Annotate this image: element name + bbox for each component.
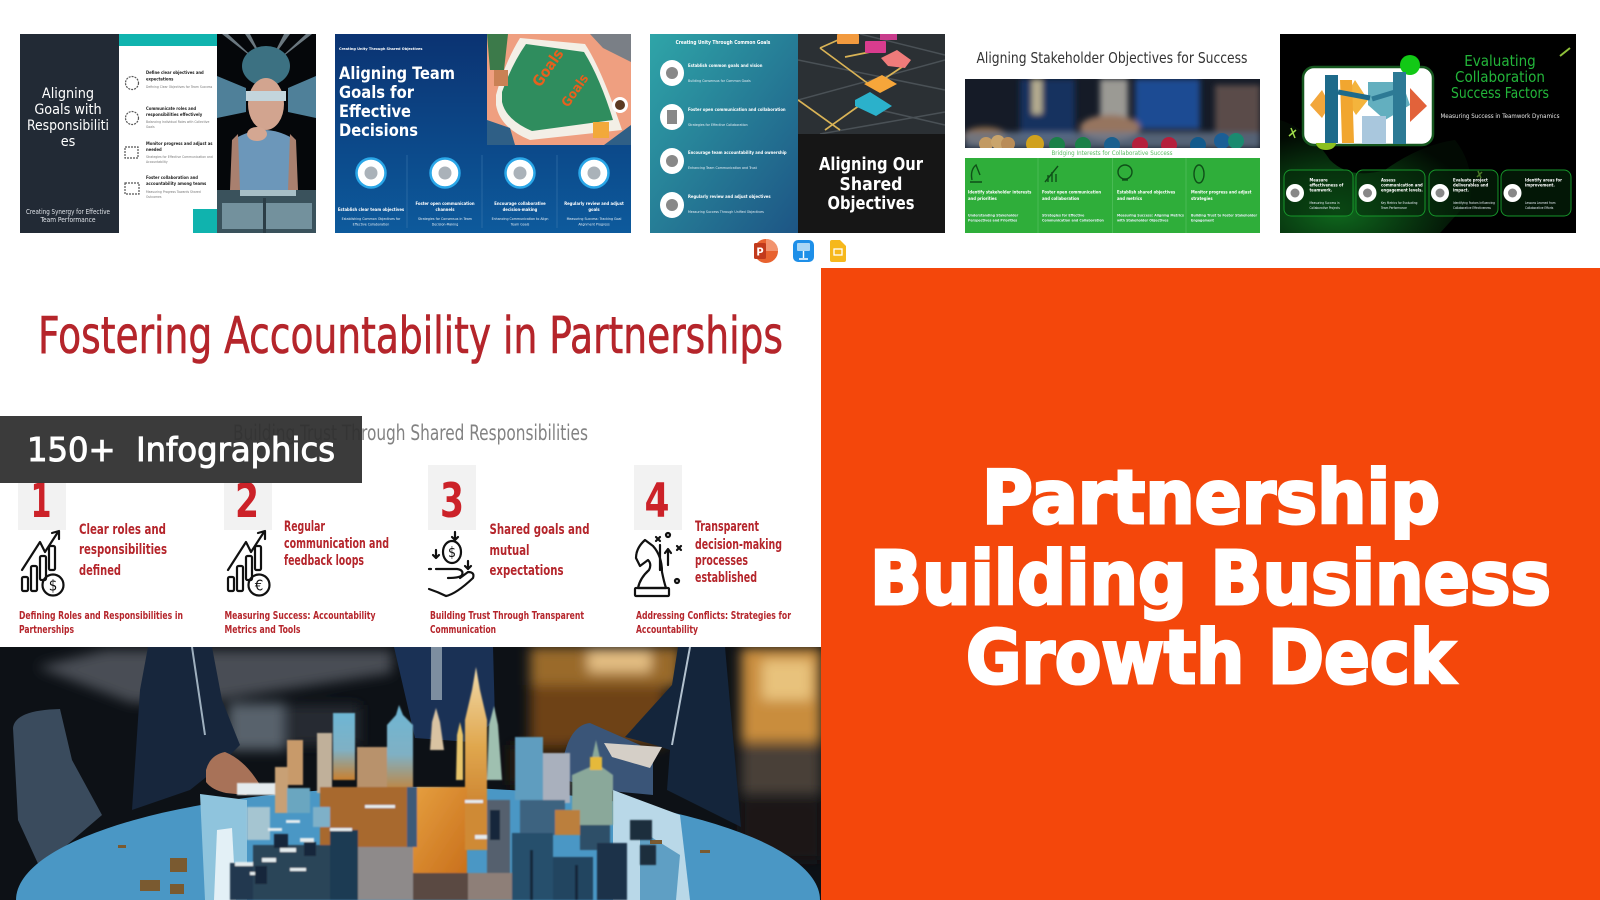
step 4: Transparent [695, 519, 759, 535]
icon: chart with dollar coin: $ [49, 576, 57, 594]
thumbnail list: Encourage team accountability and ownership [688, 150, 787, 155]
thumbnail list: Communicate roles and [146, 106, 196, 111]
thumbnail list: Goals [146, 125, 155, 129]
thumbnail list: Measuring Success Through Unified Objectives [688, 210, 764, 214]
thumbnail green panel: and metrics [1117, 196, 1143, 201]
badge: 150+ Infographics: 150+ Infographics [27, 430, 335, 469]
thumbnail cards: Evaluate project [1453, 178, 1488, 182]
thumbnail cards: improvement. [1525, 182, 1555, 188]
thumbnail subtitle: Team Performance [39, 216, 96, 224]
thumbnail list: Foster open communication and collaboration [688, 107, 786, 112]
thumbnail circles row: Encourage collaborative [494, 201, 546, 206]
thumbnail circles row [338, 155, 624, 228]
panel: main slide preview [0, 268, 821, 647]
thumbnail list: Establish common goals and vision [688, 63, 763, 68]
thumbnail circles row: Effective Collaboration [353, 222, 389, 226]
thumbnail green panel: Perspectives and Priorities [968, 218, 1017, 222]
thumbnail title: Goals with [34, 102, 102, 118]
thumbnail circles row: Enhancing Communication to Align [492, 217, 548, 221]
thumbnail title: Responsibiliti [27, 118, 109, 134]
city model [230, 667, 656, 900]
thumbnail cards: teamwork. [1310, 188, 1333, 192]
slide thumbnail: Aligning Stakeholder Objectives [963, 49, 1260, 233]
app icons row [754, 239, 846, 263]
thumbnail kicker: Creating Unity Through Common Goals [676, 40, 771, 46]
thumbnail cards: effectiveness of [1310, 182, 1344, 188]
thumbnail green panel: Measuring Success: Aligning Metrics [1117, 214, 1184, 218]
main heading: Partnership [982, 455, 1440, 541]
thumbnail title: Decisions [339, 121, 418, 141]
thumbnail title: Aligning Team [339, 64, 455, 84]
thumbnail list: Define clear objectives and [146, 70, 204, 75]
thumbnail subtitle: Measuring Success in Teamwork Dynamics [1440, 113, 1560, 120]
step 4: Accountability [636, 623, 698, 636]
thumbnail green panel: Engagement [1191, 218, 1214, 222]
thumbnail list: expectations [146, 76, 174, 82]
thumbnail title: Aligning Stakeholder Objectives for Success [976, 49, 1248, 67]
icon: Google Slides [830, 240, 846, 262]
step 3: Shared goals and [490, 522, 590, 538]
thumbnail title: Aligning Our [819, 155, 923, 175]
thumbnail list: Strategies for Effective Collaboration [688, 123, 748, 127]
thumbnail cards: Measure [1310, 178, 1328, 182]
blurred office background [37, 647, 821, 860]
step 2: Regular [284, 519, 326, 535]
step 1: 1 [30, 474, 52, 529]
icon: hand receiving coin: $ [448, 545, 456, 561]
thumbnail list: Monitor progress and adjust as [146, 141, 213, 146]
thumbnail green panel: and priorities [968, 196, 997, 201]
step 3: mutual [490, 543, 530, 559]
icon: Keynote [793, 240, 814, 262]
badge: 150+ Infographics [0, 416, 362, 483]
thumbnail green panel: Understanding Stakeholder [968, 214, 1019, 218]
thumbnail green panel: Building Trust to Foster Stakeholder [1191, 214, 1257, 218]
thumbnail photo: beads on table [963, 79, 1260, 153]
thumbnail title [339, 64, 455, 141]
thumbnail cards [1284, 170, 1571, 216]
thumbnail title: Objectives [828, 194, 914, 214]
thumbnail green panel: Establish shared objectives [1117, 190, 1176, 194]
thumbnail photo: colored tiles [798, 34, 945, 134]
step 4: established [695, 570, 757, 586]
thumbnail cards: engagement levels. [1381, 188, 1423, 192]
thumbnail list: Building Consensus for Common Goals [688, 79, 751, 83]
photo: business people around 3D city model [0, 647, 821, 900]
slide thumbnail: Aligning Our Shared Objectives [650, 34, 945, 233]
step 2: Measuring Success: Accountability [224, 609, 376, 622]
thumbnail green panel: Communication and Collaboration [1042, 218, 1105, 222]
thumbnail cards: communication and [1381, 182, 1423, 188]
thumbnail green blob background [1280, 48, 1570, 233]
thumbnail list: Balancing Individual Roles with Collective [146, 120, 209, 124]
thumbnail list: accountability among teams [146, 181, 207, 186]
thumbnail list: Strategies for Effective Communication and [146, 155, 213, 159]
thumbnail circles row: goals [588, 207, 600, 212]
slide thumbnail: Evaluating Collaboration Success Factors [1280, 34, 1576, 233]
thumbnail circles row: Strategies for Consensus in Team [418, 217, 472, 221]
thumbnail circles row: Team Goals [511, 222, 530, 226]
thumbnail circles row: Alignment Progress [578, 222, 610, 226]
step 1: defined [79, 563, 121, 579]
icon: chart with dollar coin [22, 531, 64, 596]
thumbnail green panel: and collaboration [1042, 196, 1080, 201]
step 4: 4 [644, 474, 670, 529]
main heading: Building Business [870, 536, 1551, 622]
panel: orange title block [821, 268, 1600, 900]
thumbnail title: Success Factors [1451, 84, 1549, 102]
thumbnail circles row: decision-making [503, 207, 538, 212]
main heading: Growth Deck [966, 615, 1457, 701]
step 1 [18, 465, 183, 636]
main heading [870, 455, 1551, 701]
thumbnail list [125, 70, 213, 199]
step 3: expectations [490, 563, 564, 579]
thumbnail subtitle [26, 208, 110, 224]
thumbnail circles row: channels [436, 207, 455, 212]
thumbnail subtitle: Creating Synergy for Effective [26, 208, 110, 216]
step 2: communication and [284, 536, 389, 552]
thumbnail title: Aligning [42, 86, 94, 102]
thumbnail cards: Team Performance [1381, 206, 1407, 210]
thumbnail cards: Collaborative Efforts [1525, 206, 1554, 210]
step 4: Addressing Conflicts: Strategies for [636, 609, 791, 622]
thumbnail circles row: Foster open communication [415, 201, 475, 206]
thumbnail cards: impact. [1453, 188, 1469, 192]
slide title: Fostering Accountability in Partnerships [38, 307, 783, 366]
thumbnail list: Measuring Progress Towards Shared [146, 190, 201, 194]
icon: chess knight [635, 533, 681, 596]
step 3 [428, 465, 590, 636]
step 2: feedback loops [284, 553, 364, 569]
thumbnail list: Regularly review and adjust objectives [688, 194, 771, 199]
thumbnail list: Foster collaboration and [146, 175, 198, 180]
thumbnail cards: Collaborative Effectiveness [1453, 206, 1491, 210]
thumbnail title: Shared [840, 175, 902, 195]
thumbnail illustration: handshake [1303, 55, 1433, 150]
thumbnail cards: Identifying Factors Influencing [1453, 201, 1495, 205]
thumbnail list: responsibilities effectively [146, 112, 203, 117]
step 1: responsibilities [79, 542, 167, 558]
thumbnail green panel: Foster open communication [1042, 190, 1101, 194]
thumbnail circles row: Decision-Making [432, 222, 458, 226]
table [16, 787, 820, 900]
thumbnail green panel [965, 158, 1260, 233]
thumbnail subtitle: Bridging Interests for Collaborative Success [1052, 150, 1173, 157]
thumbnail title: Effective [339, 102, 411, 122]
icon: chart with euro coin [228, 531, 270, 596]
thumbnail photo: goals board: Goals [559, 72, 592, 110]
thumbnail title [819, 155, 923, 214]
step 2 [224, 465, 389, 636]
thumbnail cards: Collaborative Projects [1310, 206, 1340, 210]
icon: hand receiving coin [429, 532, 473, 596]
step 4 [634, 465, 791, 636]
step 2: Metrics and Tools [224, 623, 301, 636]
step 3: 3 [440, 474, 464, 529]
thumbnail list: Accountability [146, 160, 168, 164]
thumbnail green panel: strategies [1191, 196, 1213, 201]
thumbnail green panel: Strategies for Effective [1042, 214, 1085, 218]
thumbnail cards: Identify areas for [1525, 178, 1562, 182]
thumbnail cards: Key Metrics for Evaluating [1381, 201, 1418, 205]
thumbnail title [1451, 52, 1549, 102]
chairs [13, 709, 653, 868]
step 3: Communication [430, 623, 496, 636]
slide thumbnail: Aligning Team Goals [335, 34, 631, 233]
thumbnail list: Enhancing Team Communication and Trust [688, 166, 758, 170]
thumbnail title [27, 86, 109, 150]
thumbnail green panel: with Stakeholder Objectives [1117, 218, 1168, 222]
thumbnail photo: goals board: Goals [529, 45, 567, 90]
thumbnail green panel: Monitor progress and adjust [1191, 190, 1252, 194]
thumbnail photo: goals board [487, 34, 631, 145]
step 1: Partnerships [19, 623, 74, 636]
businessmen [132, 647, 741, 827]
thumbnail list: Defining Clear Objectives for Team Success [146, 85, 213, 89]
thumbnail cards: Assess [1381, 178, 1396, 182]
thumbnail cards: Measuring Success in [1310, 201, 1340, 205]
thumbnail circles row: Measuring Success: Tracking Goal [567, 217, 621, 221]
thumbnail circles row: Regularly review and adjust [564, 201, 624, 206]
thumbnail kicker: Creating Unity Through Shared Objectives [339, 46, 422, 51]
thumbnail title: Collaboration [1455, 68, 1545, 86]
step 4: processes [695, 553, 748, 569]
thumbnail cards: deliverables and [1453, 182, 1489, 188]
step 4: decision-making [695, 537, 782, 553]
thumbnail photo: woman with headset [217, 34, 316, 233]
thumbnail green panel: Identify stakeholder interests [968, 190, 1032, 194]
step 3: Building Trust Through Transparent [430, 609, 584, 622]
slide thumbnail: Aligning Goals with Responsibilities [20, 34, 316, 233]
slide subtitle: Building Trust Through Shared Responsibilities [233, 421, 588, 445]
thumbnail title: Evaluating [1464, 52, 1536, 70]
thumbnail list [660, 60, 787, 218]
step 1: Clear roles and [79, 522, 166, 538]
thumbnail title: es [61, 134, 76, 150]
thumbnail list: Outcomes [146, 195, 162, 199]
icon: chart with euro coin: € [255, 576, 263, 594]
thumbnail cards: Lessons Learned from [1525, 201, 1556, 205]
thumbnail title: Goals for [339, 83, 414, 103]
step 2: 2 [235, 474, 259, 529]
thumbnail circles row: Establish clear team objectives [338, 207, 405, 212]
thumbnail circles row: Establishing Common Objectives for [342, 217, 401, 221]
icon: PowerPoint: P [756, 246, 764, 258]
thumbnail list: needed [146, 147, 162, 152]
step 1: Defining Roles and Responsibilities in [19, 609, 183, 622]
